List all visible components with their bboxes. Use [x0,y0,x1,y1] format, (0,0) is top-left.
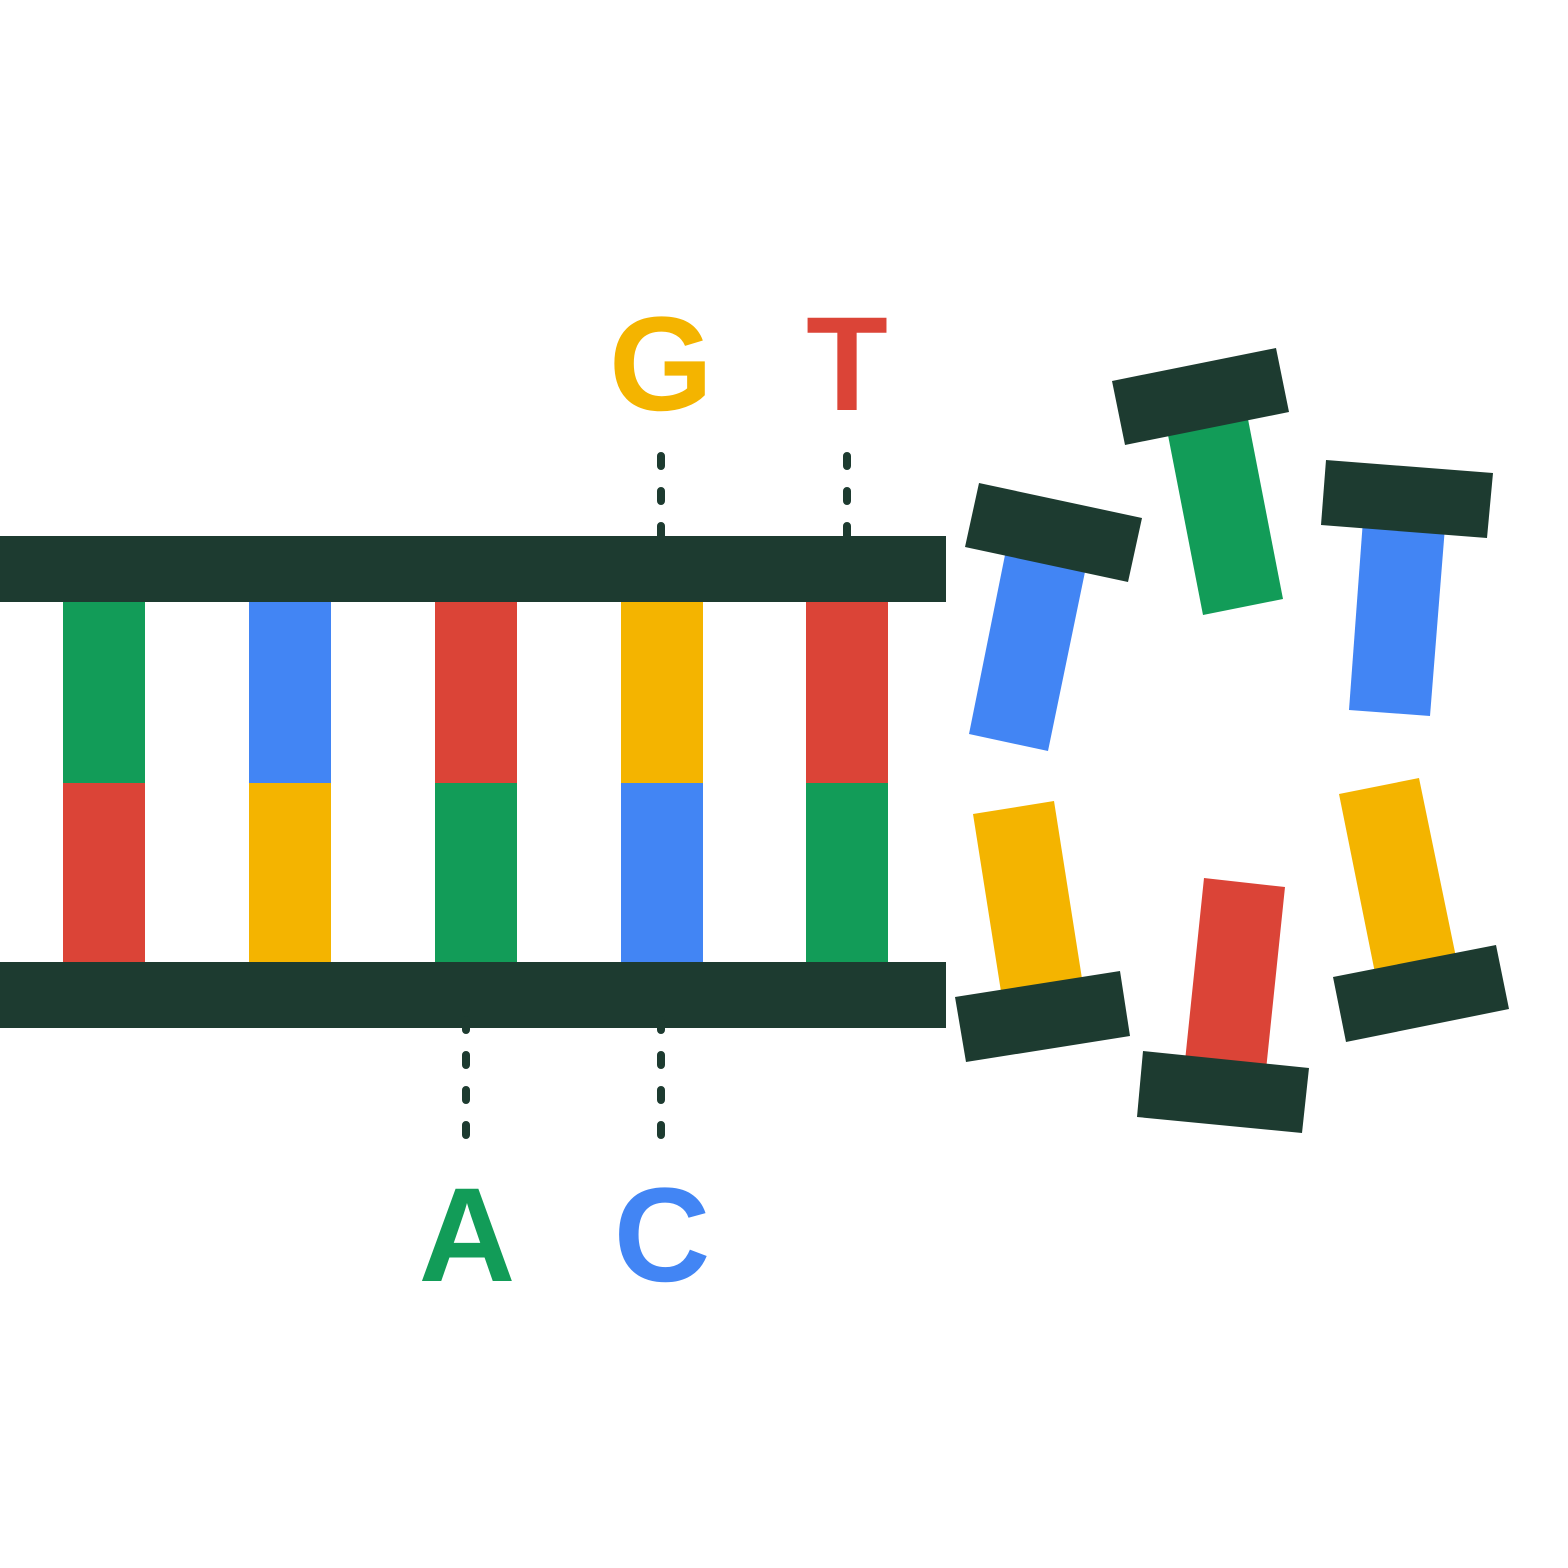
rung 1 [63,598,145,965]
letter T: T [806,290,888,439]
letter A: A [419,1161,515,1310]
letter C: C [614,1161,710,1310]
loose piece: blue 1 [965,483,1142,751]
loose piece: blue 2 [1321,460,1493,716]
loose piece: yellow 2 [1333,778,1509,1042]
loose piece: red [1137,878,1309,1133]
loose piece: green [1112,348,1289,615]
dotted connectors [466,456,847,1140]
rung 5 [806,598,888,965]
bottom backbone [0,962,946,1028]
rung 2 [249,598,331,965]
rung 3 [435,598,517,965]
rung 4 [621,598,703,965]
top backbone [0,536,946,602]
letter G: G [609,290,713,439]
loose piece: yellow 1 [955,801,1130,1062]
